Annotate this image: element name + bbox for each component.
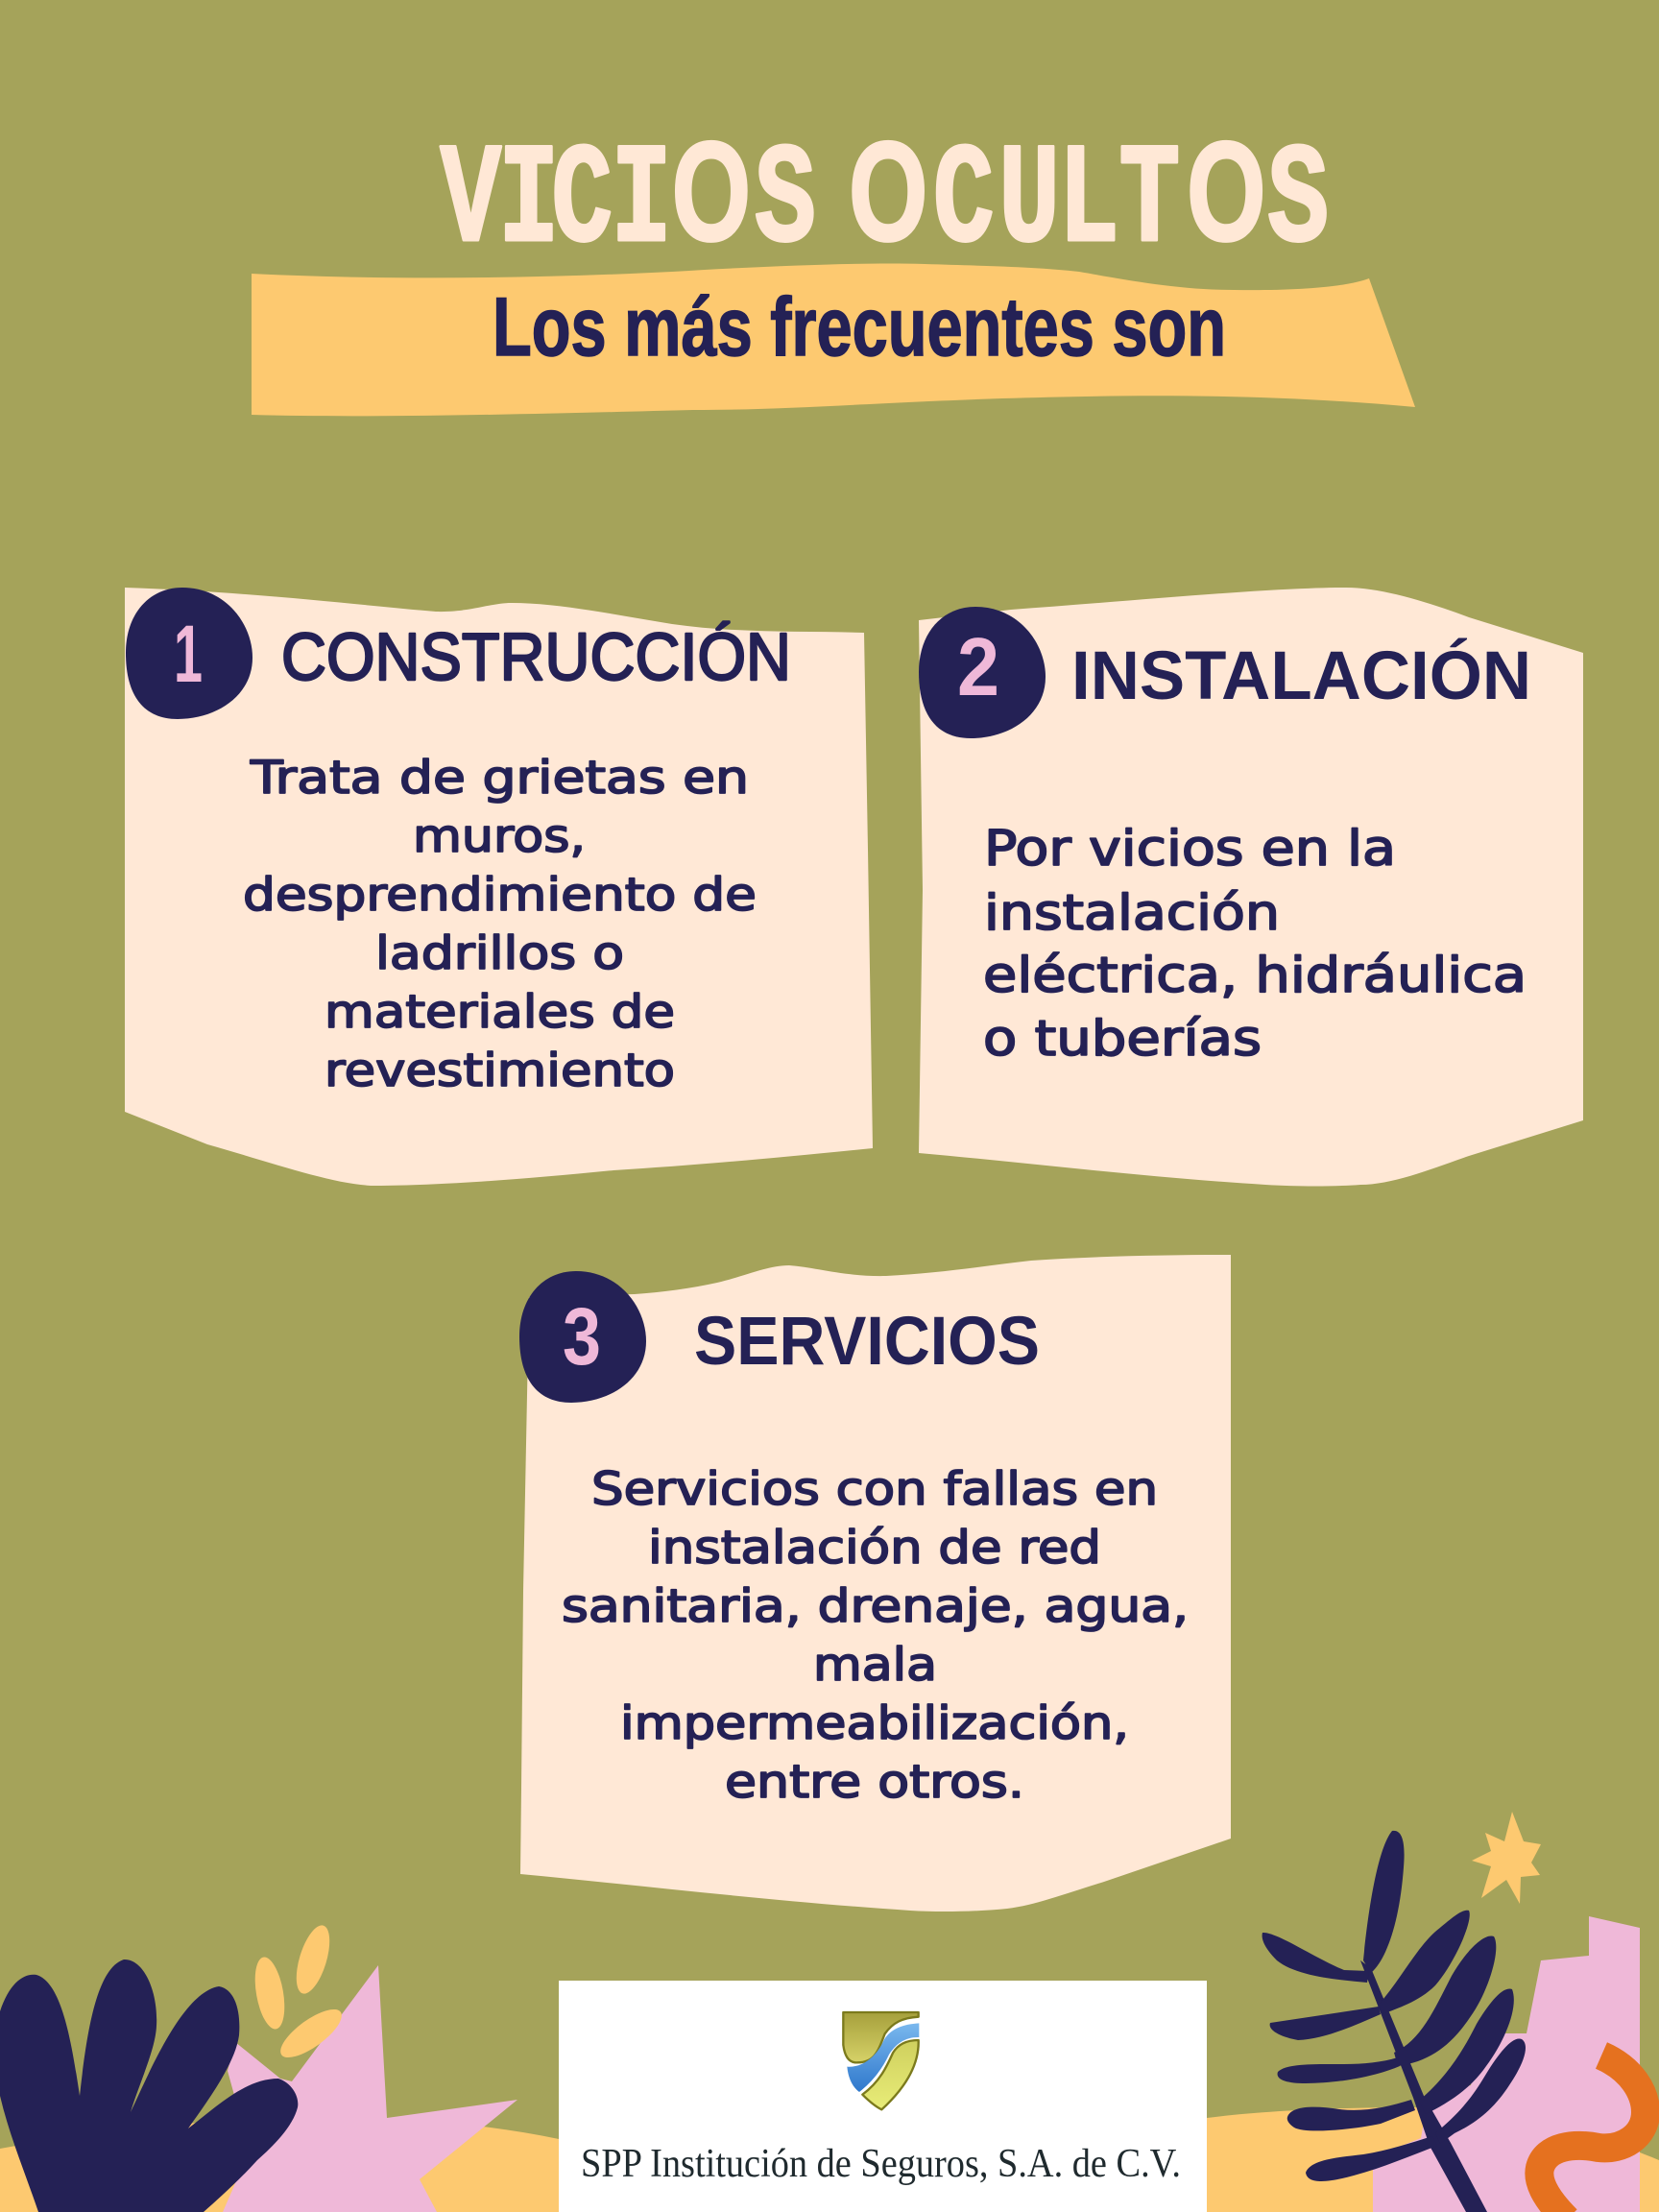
heading: servicios: SERVICIOS	[694, 1304, 1040, 1380]
badge 1	[126, 588, 252, 719]
body text: Servicios con fallas en	[591, 1463, 1158, 1516]
body text: revestimiento	[325, 1045, 675, 1097]
decoration: navy plant	[1262, 1831, 1526, 2212]
body text: sanitaria, drenaje, agua,	[562, 1580, 1189, 1633]
decoration: pink star	[223, 1965, 517, 2212]
body text: Por vicios en la	[984, 821, 1396, 878]
heading: construcción: CONSTRUCCIÓN	[281, 619, 791, 694]
body text	[983, 821, 1527, 1068]
subtitle banner	[252, 263, 1415, 416]
decoration: navy leaf	[0, 1960, 298, 2212]
body text: entre otros.	[725, 1756, 1024, 1809]
heading: instalación: INSTALACIÓN	[1071, 638, 1531, 714]
body text	[243, 752, 757, 1097]
body text: o tuberías	[983, 1011, 1262, 1068]
decoration: orange squiggle	[1539, 2056, 1646, 2212]
body text: muros,	[413, 810, 586, 863]
subtitle text: Los más frecuentes son	[493, 281, 1226, 373]
badge 3	[519, 1271, 646, 1403]
body text: ladrillos o	[375, 927, 624, 980]
badge 2	[919, 607, 1046, 738]
body text: impermeabilización,	[620, 1697, 1129, 1750]
decoration: yellow star	[1472, 1812, 1541, 1904]
body text: instalación	[984, 885, 1280, 942]
body text: Trata de grietas en	[250, 752, 749, 805]
panel: instalación	[919, 588, 1583, 1187]
panel: construcción	[125, 588, 873, 1186]
logo text: SPP Institución de Seguros, S.A. de C.V.	[581, 2142, 1181, 2186]
body text: instalación de red	[648, 1522, 1101, 1575]
icon: SPP shield logo	[843, 2012, 919, 2109]
body text	[562, 1463, 1189, 1809]
body text: materiales de	[325, 986, 675, 1039]
number 3: 3	[563, 1291, 601, 1382]
number 1: 1	[174, 609, 203, 699]
logo panel	[559, 1981, 1207, 2212]
decoration: pink building shape	[1373, 1916, 1640, 2212]
body text: desprendimiento de	[243, 869, 757, 922]
title: VICIOS OCULTOS	[440, 113, 1329, 283]
number 2: 2	[957, 622, 999, 713]
yellow ground	[0, 2107, 1659, 2212]
panel: servicios	[519, 1255, 1231, 1911]
decoration: yellow leaves	[251, 1922, 349, 2066]
body text: eléctrica, hidráulica	[983, 948, 1527, 1004]
body text: mala	[813, 1639, 937, 1692]
